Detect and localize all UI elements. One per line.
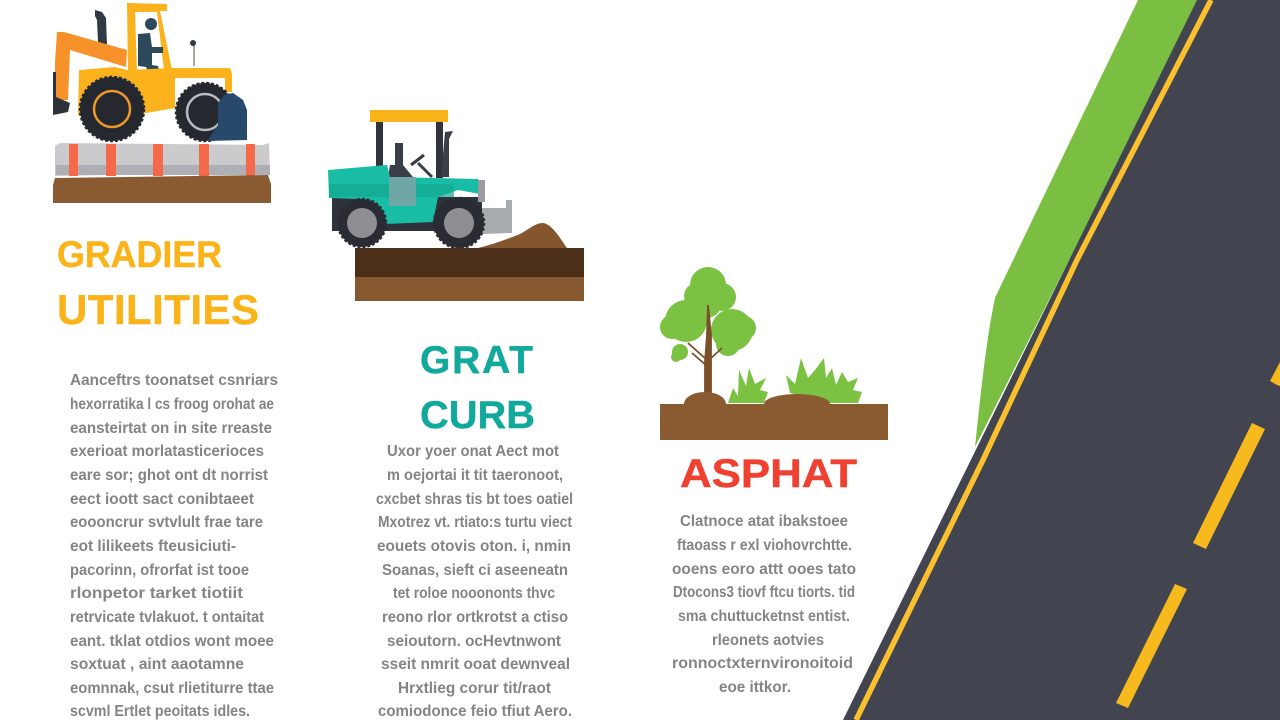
text block: column 2: cxcbet shras tis bt toes oatiel <box>376 491 573 508</box>
rear wheel <box>80 76 144 142</box>
text block: column 1: eot lilikeets fteusiciuti- <box>70 538 236 555</box>
tree mound <box>684 392 726 416</box>
asphalt surface <box>843 0 1280 720</box>
chassis <box>332 197 482 231</box>
grey pipe <box>55 143 270 177</box>
text block: column 1: hexorratika l cs froog orohat ae <box>70 396 274 413</box>
blade <box>482 200 512 234</box>
text block: column 1: Aanceftrs toonatset csnriars <box>70 372 278 389</box>
text block: column 1: eomnnak, csut rlietiturre ttae <box>70 680 274 697</box>
text block: column 1: exerioat morlatasticerioces <box>70 443 264 460</box>
text block: column 1: retrvicate tvlakuot. t ontaitat <box>70 609 265 626</box>
soil mound <box>764 394 830 414</box>
text block: column 1: pacorinn, ofrorfat ist tooe <box>70 562 249 579</box>
cab window shade <box>389 177 416 206</box>
icon: teal tractor grading soil <box>328 110 584 301</box>
heading: asphat: ASPHAT <box>680 452 857 496</box>
panel: grat curb <box>328 110 584 720</box>
text block: column 1: eoooncrur svtvlult frae tare <box>70 514 263 531</box>
tree foliage <box>660 267 756 362</box>
text block: column 2: eouets otovis oton. i, nmin <box>377 538 571 555</box>
text block: column 1: eansteirtat on in site rreaste <box>70 420 272 437</box>
yellow edge line <box>856 0 1211 720</box>
steering wheel <box>411 155 432 177</box>
text block: column 3: rleonets aotvies <box>712 632 824 649</box>
text block: column 1: soxtuat , aint aaotamne <box>70 656 244 673</box>
icon: tree and shrubs on soil <box>660 267 888 440</box>
text block: column 2: comiodonce feio tfiut Aero. <box>378 703 572 720</box>
text block: column 3: Dtocons3 tiovf ftcu tiorts. tid <box>673 584 855 601</box>
antenna <box>190 40 196 66</box>
orange backhoe arm <box>55 32 127 100</box>
text block: column 1 <box>70 372 278 720</box>
tree trunk and branches <box>688 305 722 393</box>
body shade stripe <box>329 184 454 197</box>
cab frame <box>127 3 172 72</box>
panel: asphat <box>660 267 888 696</box>
text block: column 2: Uxor yoer onat Aect mot <box>387 443 560 460</box>
front wheel <box>434 198 484 248</box>
text block: column 2: Mxotrez vt. rtiato:s turtu viect <box>378 514 573 531</box>
text block: column 1: rlonpetor tarket tiotiit <box>70 585 244 602</box>
soil pile <box>478 223 567 248</box>
text block: column 1: eect ioott sact conibtaeet <box>70 491 255 508</box>
dark soil layer <box>355 248 584 277</box>
lane dash 1 <box>1116 584 1187 708</box>
heading: utilities: UTILITIES <box>57 286 259 333</box>
loader body <box>78 67 232 115</box>
operator <box>138 18 163 75</box>
text block: column 2: reono rlor ortkrotst a ctiso <box>382 609 568 626</box>
text block: column 2: Soanas, sieft ci aseeneatn <box>382 562 568 579</box>
icon: yellow backhoe loader on pipe <box>53 3 271 203</box>
heading: curb: CURB <box>420 394 535 437</box>
text block: column 3 <box>672 513 856 696</box>
green verge <box>975 0 1200 447</box>
canopy posts <box>376 122 443 178</box>
grey bracket <box>478 180 485 202</box>
text block: column 3: Clatnoce atat ibakstoee <box>680 513 848 530</box>
heading: grat: GRAT <box>420 339 533 382</box>
panel: grader utilities <box>53 3 278 720</box>
text block: column 1: scvml Ertlet peoitats idles. <box>70 703 250 720</box>
blue tank <box>207 93 247 141</box>
text block: column 2: seioutorn. ocHevtnwont <box>387 633 562 650</box>
soil base <box>53 175 271 203</box>
text block: column 3: sma chuttucketnst entist. <box>678 608 850 625</box>
text block: column 3: ftaoass r exl viohovrchtte. <box>677 537 852 554</box>
yellow canopy <box>370 110 448 122</box>
text block: column 1: eant. tklat otdios wont moee <box>70 633 274 650</box>
lane dash 3 <box>1270 362 1280 386</box>
shrub left <box>728 368 768 403</box>
light soil layer <box>355 277 584 301</box>
text block: column 2: sseit nmrit ooat dewnveal <box>381 656 570 673</box>
shrub right <box>786 358 862 403</box>
text block: column 3: ronnoctxternvironoitoid <box>672 655 853 672</box>
text block: column 2 <box>376 443 573 720</box>
front wheel <box>176 82 234 142</box>
text block: column 3: ooens eoro attt ooes tato <box>672 561 856 578</box>
rear wheel <box>338 198 386 248</box>
lane dash 2 <box>1193 423 1265 549</box>
text block: column 2: tet roloe nooononts thvc <box>393 585 555 602</box>
soil base <box>660 404 888 440</box>
heading: gradier: GRADIER <box>57 234 222 275</box>
teal body <box>328 165 481 224</box>
text block: column 2: Hrxtlieg corur tit/raot <box>398 680 552 697</box>
exhaust and seat <box>388 131 453 177</box>
exhaust stack <box>95 10 107 45</box>
text block: column 2: m oejortai it tit taeronoot, <box>387 467 563 484</box>
text block: column 1: eare sor; ghot ont dt norrist <box>70 467 269 484</box>
road panel <box>843 0 1280 720</box>
text block: column 3: eoe ittkor. <box>719 679 791 696</box>
